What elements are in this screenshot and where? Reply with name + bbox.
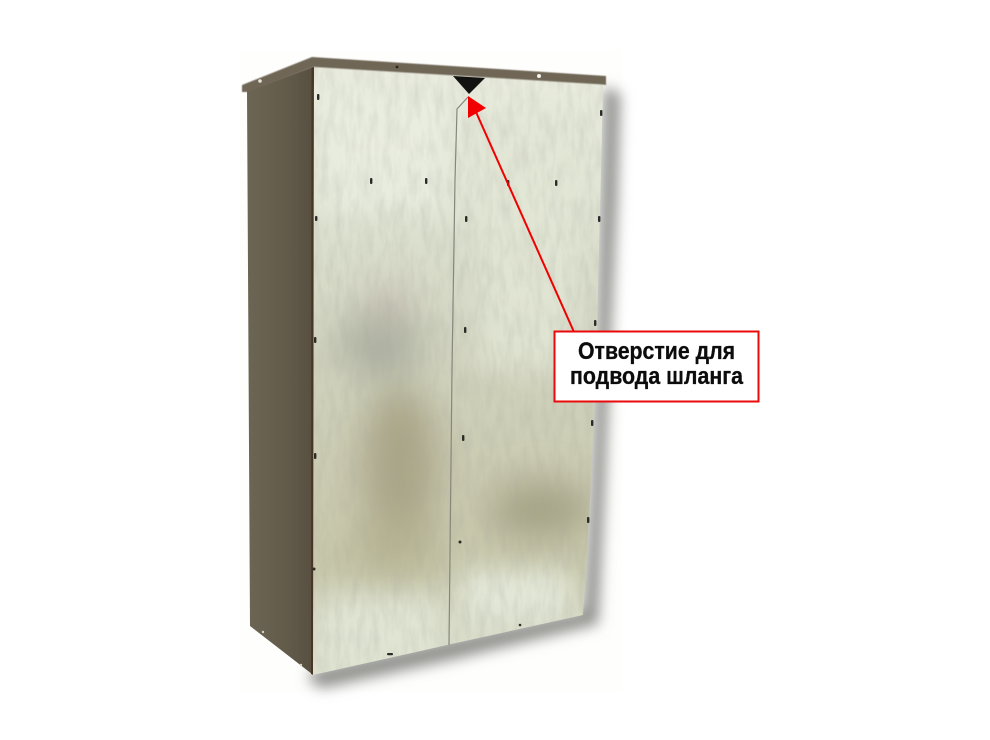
callout: hose opening label: Отверстие для bbox=[578, 338, 735, 365]
callout: hose opening label bbox=[554, 332, 758, 402]
photo: gas cabinet rear view bbox=[240, 50, 622, 692]
cabinet cast shadow bbox=[308, 86, 620, 688]
callout: hose opening label: подвода шланга bbox=[570, 363, 744, 390]
side panel bbox=[247, 67, 313, 674]
galvanized mottled texture bbox=[300, 60, 610, 680]
lid screws bbox=[258, 66, 541, 83]
photo backdrop halo bbox=[240, 50, 622, 692]
metal reflection patches bbox=[338, 284, 592, 571]
side panel screws bbox=[262, 631, 302, 666]
lid top strip bbox=[242, 57, 606, 92]
infographic canvas bbox=[241, 56, 760, 696]
front panel door seam bbox=[449, 97, 468, 645]
panel rivets bbox=[312, 94, 602, 655]
bright lower and upper patches bbox=[322, 90, 580, 670]
front galvanized panel bbox=[300, 60, 610, 680]
red arrow pointing to the opening bbox=[468, 96, 574, 332]
hose opening (dark triangle) bbox=[453, 76, 485, 94]
edge of the side panel bbox=[311, 67, 314, 675]
